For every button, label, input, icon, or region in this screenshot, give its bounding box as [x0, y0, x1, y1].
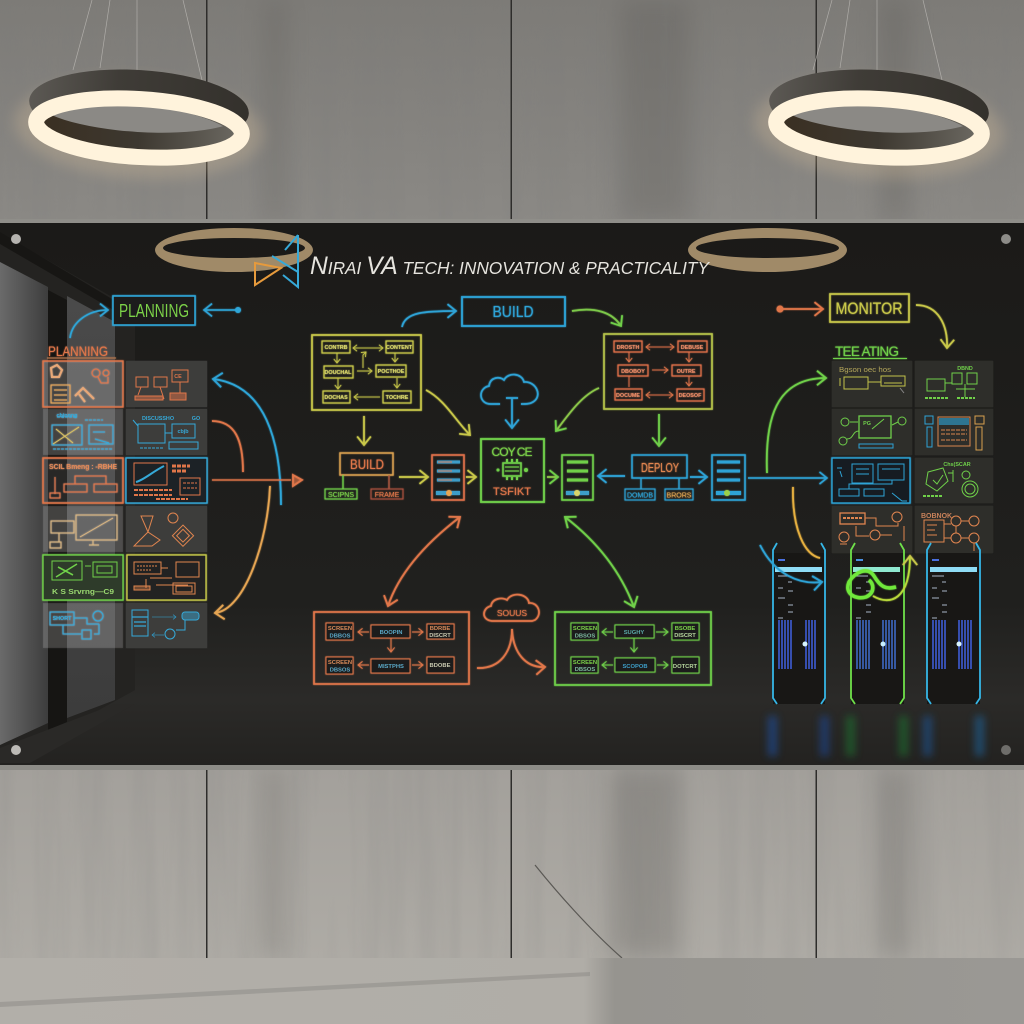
- tile: process boxes: [832, 361, 912, 407]
- tile: database and monitor: [832, 409, 912, 455]
- tile: sustainability icons: [43, 361, 123, 407]
- panel: orange flowchart: MISTPHS: [378, 664, 404, 670]
- tile: discussion diagram: DISCUSSHO: [142, 416, 174, 422]
- tile: process boxes: Bgson oec hos: [839, 367, 892, 374]
- tile: chart and chart window: [43, 409, 123, 455]
- tile: chart and chart window: cbjnnng: [57, 413, 77, 419]
- title text: NIRAI VA TECH: INNOVATION & PRACTICALITY: [310, 252, 710, 280]
- tile: database and monitor: PG: [863, 421, 871, 427]
- deploy step with labels: [625, 455, 693, 500]
- arrows to core box: [364, 388, 707, 477]
- panel: green flowchart: SUGHY: [624, 630, 644, 636]
- tile: molecule shapes: [126, 506, 207, 552]
- monitor arrows to tiles and servers: [748, 378, 910, 600]
- panel: yellow flowchart: POCTHOE: [378, 369, 405, 375]
- pendant lamp left: [11, 0, 267, 186]
- panel: orange flowchart: BDOBE: [430, 663, 451, 669]
- tile: green circles: Chs(SCAR: [943, 462, 971, 468]
- right tile grid: [832, 361, 993, 553]
- panel: yellow flowchart: CONTENT: [386, 345, 413, 351]
- server rack 1: [773, 543, 825, 704]
- tile: monitor with line: [43, 506, 123, 552]
- planning label box: PLANNING: [119, 301, 189, 321]
- panel: red flowchart: DOCUME: [616, 393, 640, 399]
- panel: yellow flowchart: TOCHRE: [386, 395, 409, 401]
- core box: COY CE: [492, 445, 532, 459]
- panel: green flowchart: SCREEN: [573, 626, 597, 632]
- left tile grid: [43, 361, 207, 648]
- build step with labels: FRAME: [375, 492, 400, 499]
- panel: green flowchart: SCREEN: [573, 660, 597, 666]
- planning section: [47, 296, 241, 359]
- deploy step with labels: BRORS: [667, 492, 692, 500]
- panel: red flowchart: DEOSOF: [679, 393, 702, 399]
- tile: orange nodes: BOBNOK: [921, 513, 952, 520]
- build label box: BUILD: [492, 304, 534, 321]
- small server blue: [712, 455, 745, 500]
- planning sublabel: PLANNING: [48, 343, 108, 359]
- panel: orange flowchart: DBBOS: [330, 634, 351, 640]
- panel: green flowchart: BSOBE: [675, 626, 695, 632]
- tile: green network: DBND: [957, 366, 973, 372]
- left arrows: [212, 379, 302, 613]
- panel: green flowchart: [555, 612, 711, 685]
- panel: yellow flowchart: CONTRB: [324, 345, 348, 351]
- title with logo: [255, 235, 710, 287]
- core box: TSFIKT: [493, 486, 531, 498]
- tile: discussion diagram: GO: [192, 416, 200, 422]
- server rack 3: [927, 543, 980, 704]
- build step with labels: BUILD: [350, 456, 384, 472]
- tile: highlighted chart: [126, 458, 207, 503]
- panel: orange flowchart: DBSOS: [330, 668, 350, 674]
- tile: blue server flow: [126, 603, 207, 648]
- panel: orange flowchart: DISCRT: [429, 633, 451, 639]
- tile: orange nodes: [915, 506, 993, 553]
- panel: green flowchart: DISCRT: [674, 633, 696, 639]
- panel: red flowchart: [604, 334, 712, 409]
- tile: orange circuit: [832, 506, 912, 553]
- diagonal double arrows: [388, 517, 634, 607]
- build step with labels: [325, 453, 403, 499]
- arrows around monitor: [776, 305, 947, 348]
- tile: computers network: [126, 361, 207, 407]
- panel: yellow flowchart: [312, 335, 421, 410]
- tile: blue wireframes: [832, 458, 910, 503]
- lamp reflections on board: [155, 228, 847, 272]
- panel: green flowchart: DOTCRT: [673, 664, 698, 670]
- panel: yellow flowchart: DOCHAS: [324, 395, 348, 401]
- panel: green flowchart: SCOPOB: [622, 664, 648, 670]
- monitor label box: MONITOR: [836, 299, 902, 318]
- window reflection on board: [0, 232, 135, 765]
- tile: discussion diagram: [126, 409, 207, 455]
- splitting arrow: [477, 629, 545, 668]
- core box: [481, 439, 544, 502]
- tile: data table: [915, 409, 993, 455]
- build section: [312, 297, 745, 502]
- panel: red flowchart: DBOBOY: [621, 369, 645, 375]
- panel: orange flowchart: SCREEN: [328, 660, 352, 666]
- tile: green dashboard: K S Srvrng—C9: [52, 587, 114, 596]
- panel: green flowchart: DBSOS: [575, 667, 595, 673]
- tile: green dashboard: [43, 555, 123, 600]
- monitor label box: [830, 294, 909, 322]
- glass board panel: [0, 219, 1024, 770]
- small server orange: [432, 455, 464, 500]
- panel: orange flowchart: BDRBE: [430, 626, 450, 632]
- tile: org structure: [43, 458, 123, 503]
- deploy step with labels: DOMDB: [627, 492, 653, 500]
- mounting screws: [11, 234, 1011, 755]
- icon: chip: [496, 459, 528, 480]
- arrows from build label: [402, 310, 621, 327]
- pendant lamp right: [751, 0, 1007, 186]
- tile: green circles: [915, 458, 993, 503]
- bottom section: [314, 517, 711, 685]
- arrows around planning label: [70, 307, 241, 338]
- tile: computers network: CE: [174, 374, 182, 380]
- panel: red flowchart: DEBUSE: [681, 345, 704, 351]
- testing sublabel: TEE ATING: [835, 344, 899, 359]
- panel: red flowchart: OUTRE: [677, 369, 696, 375]
- tile: yellow border workflow: [127, 555, 206, 600]
- tile: green network: [915, 361, 993, 407]
- icon: triangular logo: [255, 235, 298, 287]
- icon: blue cloud with down arrow: [481, 375, 538, 428]
- panel: yellow flowchart: DOUCHAL: [325, 370, 352, 376]
- tile: org structure: SCIL Bmeng : -RBHE: [49, 464, 117, 471]
- small server green: [562, 455, 593, 500]
- tile: blue flow: SHORT: [53, 616, 72, 622]
- deploy step with labels: DEPLOY: [641, 460, 679, 475]
- panel: green flowchart: DBSOS: [575, 634, 595, 640]
- server rack 2: [851, 543, 904, 704]
- icon: orange cloud: [484, 595, 539, 621]
- build step with labels: SCIPNS: [328, 492, 354, 499]
- tile: blue flow: [43, 603, 123, 648]
- monitor section: [776, 294, 947, 359]
- build label box: [462, 297, 565, 326]
- server racks: [768, 543, 984, 756]
- icon: orange cloud: SOUUS: [497, 608, 527, 618]
- panel: red flowchart: DROSTH: [617, 345, 639, 351]
- planning label box: [113, 296, 195, 325]
- server floor reflections: [768, 716, 984, 756]
- panel: orange flowchart: [314, 612, 469, 684]
- panel: orange flowchart: BOOPIN: [380, 630, 402, 636]
- tile: discussion diagram: cbjb: [177, 429, 189, 435]
- panel: orange flowchart: SCREEN: [328, 626, 352, 632]
